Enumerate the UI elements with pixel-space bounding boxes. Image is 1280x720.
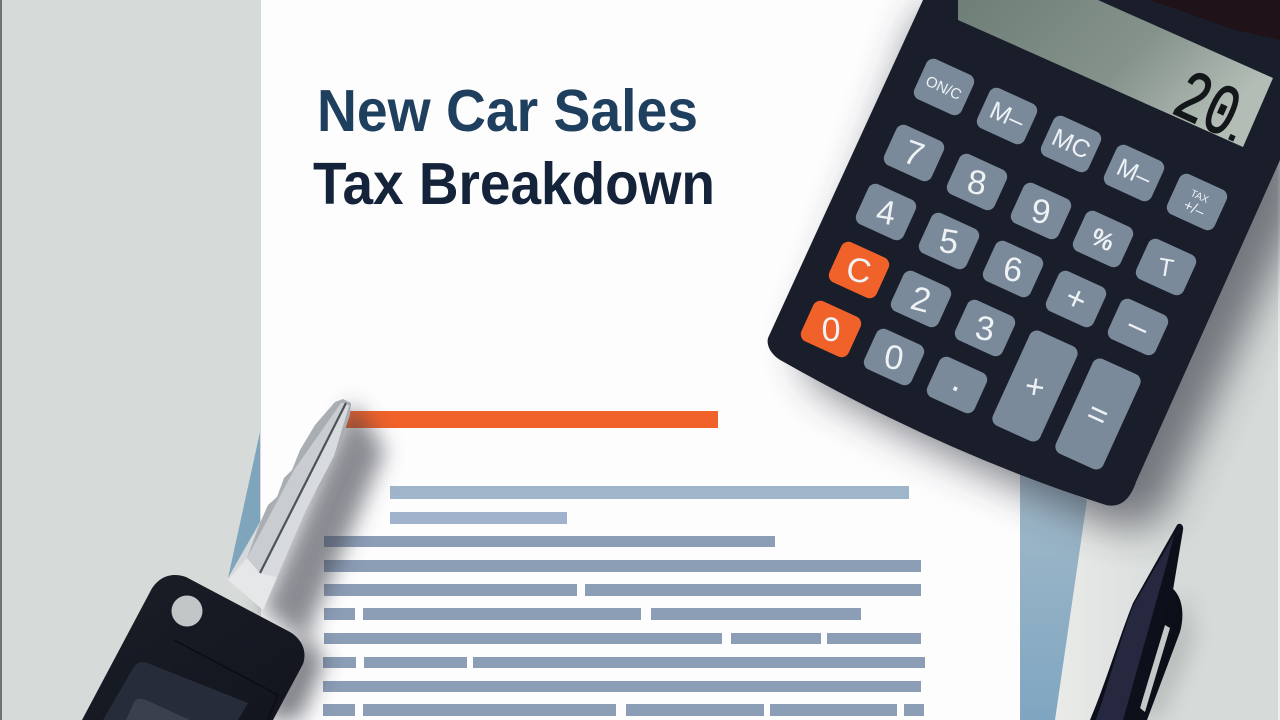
key: MC: MC (1047, 123, 1095, 165)
paper document (261, 0, 1020, 720)
key: OFF: ON/C (923, 73, 964, 104)
key: tax: TAX (1188, 188, 1210, 206)
key: orange 0 (798, 298, 864, 360)
key shank (276, 533, 296, 578)
title line 1: New Car Sales (317, 78, 698, 144)
left edge line (0, 0, 2, 720)
key: percent: % (1087, 223, 1119, 257)
key: M- second: M– (1112, 153, 1156, 193)
LCD display (958, 0, 1273, 147)
calculator shadow (800, 10, 1280, 530)
key: 6: 6 (1000, 250, 1025, 290)
key: tax: +/– (1181, 197, 1208, 221)
key: equals (1053, 356, 1143, 472)
key: minus (1105, 296, 1171, 358)
key: 8 (944, 151, 1010, 213)
key blade right strip (264, 404, 349, 568)
key: 2: 2 (907, 279, 935, 321)
pen body (1090, 524, 1183, 720)
key: orange C: C (844, 250, 874, 292)
key: 4 (853, 181, 919, 243)
key: OFF (914, 58, 974, 116)
key fob button panel (103, 662, 248, 720)
key: plus small (1043, 268, 1109, 330)
key: minus: – (1122, 305, 1155, 347)
document text lines (323, 486, 925, 716)
orange accent bar (345, 411, 718, 428)
key: M- (974, 85, 1040, 147)
key: equals: = (1081, 394, 1115, 436)
key: decimal (924, 354, 990, 416)
key: 7 (881, 122, 947, 184)
LCD reading: 20 (1161, 57, 1251, 158)
key: big plus: + (1022, 367, 1048, 407)
key: orange 0: 0 (821, 311, 841, 349)
keypad (798, 56, 1230, 472)
pen body highlight (1096, 535, 1174, 720)
key blade left strip (247, 403, 345, 573)
right edge line (1278, 161, 1280, 720)
key: M- second (1101, 142, 1167, 204)
calculator body (768, 0, 1280, 506)
calculator (768, 0, 1280, 530)
key: 8: 8 (964, 163, 989, 203)
blue folder corner left (228, 432, 260, 578)
desk highlight beside folder (1055, 502, 1127, 720)
key: 2 (888, 268, 954, 330)
key: 5: 5 (936, 222, 961, 262)
silver button (172, 596, 202, 626)
key: 0 (861, 326, 927, 388)
key: root (1133, 236, 1199, 298)
key: 6 (980, 238, 1046, 300)
dark red display top (1150, 0, 1280, 40)
key shank base (228, 558, 277, 610)
key: tax (1164, 171, 1230, 233)
key: M-: M– (985, 96, 1029, 136)
blue folder strip right (1020, 470, 1087, 720)
key: MC (1038, 113, 1104, 175)
title line 2: Tax Breakdown (313, 151, 715, 217)
title (314, 88, 712, 205)
key: decimal: . (949, 367, 968, 397)
key groove (260, 403, 346, 573)
key: root: T (1156, 253, 1176, 283)
key: 0: 0 (881, 338, 906, 378)
key fob body (82, 575, 304, 720)
key: plus small: + (1059, 278, 1093, 320)
pen shadow (1147, 602, 1200, 720)
key: 4: 4 (873, 193, 898, 233)
key: 7: 7 (898, 133, 929, 175)
key: orange C (826, 239, 892, 301)
pen (1090, 524, 1194, 720)
key shadow (262, 402, 385, 640)
key: percent (1070, 208, 1136, 270)
key: 5 (916, 210, 982, 272)
key fob seam (174, 640, 278, 720)
pen clip (1137, 589, 1182, 720)
key blade serrated (247, 399, 351, 573)
key: 9 (1008, 180, 1074, 242)
key: 3 (952, 297, 1018, 359)
pen clip gap (1140, 625, 1170, 712)
key: big plus (990, 328, 1080, 444)
key fob inner button (126, 699, 190, 720)
key: 3: 3 (972, 309, 997, 349)
LCD reading: . (1219, 114, 1249, 153)
key: 9: 9 (1028, 192, 1053, 232)
car key (82, 399, 385, 720)
key fob shadow (260, 630, 325, 720)
